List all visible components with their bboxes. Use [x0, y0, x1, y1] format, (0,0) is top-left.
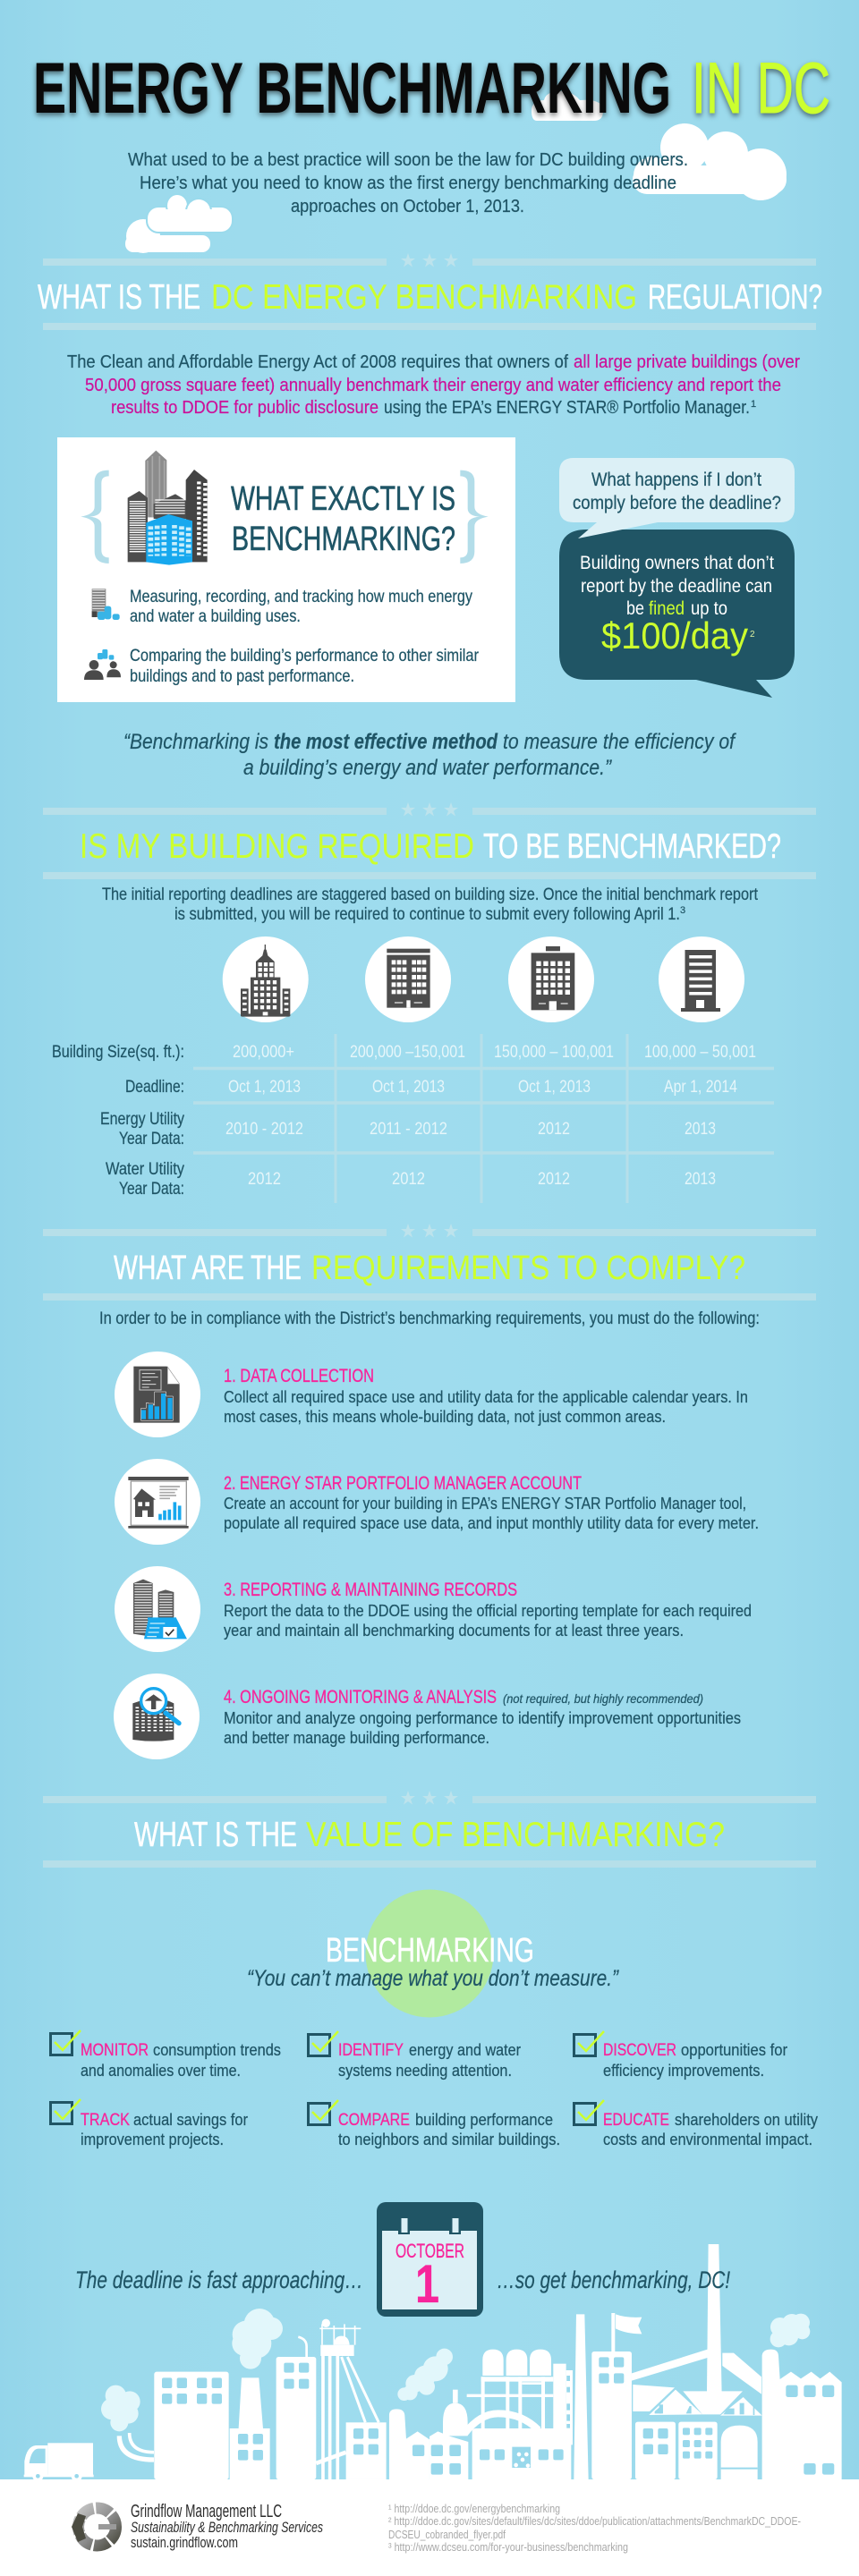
row labels: Deadline: — [125, 1078, 184, 1097]
checklist: discover: DISCOVER — [603, 2041, 676, 2060]
bullet text: measuring: and water a building uses. — [130, 607, 301, 626]
quote: the most effective method — [274, 730, 498, 754]
step 4 text: (not required, but highly recommended) — [503, 1691, 703, 1706]
table values: 2012 — [538, 1170, 570, 1189]
regulation paragraph — [67, 352, 800, 418]
skyline: right — [397, 2244, 842, 2479]
checklist: compare: to neighbors and similar buildings. — [338, 2131, 560, 2148]
checklist: identify — [308, 2031, 521, 2080]
bullet text: measuring: Measuring, recording, and tracking how much energy — [130, 588, 472, 606]
calendar — [377, 2202, 483, 2317]
intro text: What used to be a best practice will soon be the law for DC building owners. — [128, 150, 688, 170]
checklist: identify: energy and water — [409, 2041, 521, 2059]
checklist: track: TRACK — [81, 2111, 130, 2130]
speech bubble: answer — [559, 530, 795, 698]
checklist: monitor: MONITOR — [81, 2041, 149, 2060]
table values: Oct 1, 2013 — [518, 1078, 591, 1097]
intro text — [128, 150, 688, 216]
deadlines text: is submitted, you will be required to continue to submit every following April 1. — [174, 905, 680, 924]
heading: requirements to comply: WHAT ARE THE — [114, 1250, 302, 1287]
checklist: educate — [574, 2100, 818, 2148]
icon: Grindflow gear logo — [72, 2508, 116, 2546]
step 1 text — [224, 1366, 748, 1426]
table values — [225, 1043, 756, 1189]
table values: 200,000 –150,001 — [350, 1043, 465, 1062]
checklist: discover: efficiency improvements. — [603, 2062, 764, 2080]
heading: BENCHMARKING? — [232, 521, 455, 558]
table values: Oct 1, 2013 — [228, 1078, 301, 1097]
table values: 150,000 – 100,001 — [494, 1043, 614, 1062]
step 1 text: 1. DATA COLLECTION — [224, 1366, 374, 1386]
heading: is my building required: IS MY BUILDING REQUIRED — [80, 827, 474, 866]
answer text: report by the deadline can — [581, 576, 772, 597]
bullet text: measuring — [130, 588, 472, 626]
checklist: monitor: and anomalies over time. — [81, 2062, 241, 2080]
icon: reporting records — [115, 1566, 200, 1652]
answer text: up to — [691, 598, 727, 619]
checklist: identify: IDENTIFY — [338, 2041, 404, 2060]
checklist: compare: COMPARE — [338, 2111, 410, 2130]
benchmarking label: BENCHMARKING — [326, 1932, 534, 1970]
footnotes: DCSEU_cobranded_flyer.pdf — [388, 2528, 506, 2541]
regulation paragraph: 50,000 gross square feet) annually benchmark their energy and water efficiency and report the — [85, 376, 781, 395]
regulation paragraph: all large private buildings (over — [574, 352, 800, 372]
heading: what is the regulation — [38, 278, 822, 317]
heading: requirements to comply: REQUIREMENTS TO COMPLY? — [311, 1250, 745, 1287]
question text — [573, 470, 781, 513]
heading: value of benchmarking — [134, 1816, 725, 1854]
step 3 text — [224, 1580, 752, 1640]
heading: is my building required — [80, 827, 781, 866]
icon: data collection — [115, 1352, 200, 1437]
step 2 text: Create an account for your building in EPA’s ENERGY STAR Portfolio Manager tool, — [224, 1495, 746, 1513]
heading: value of benchmarking: WHAT IS THE — [134, 1816, 297, 1854]
table values: 2013 — [685, 1120, 716, 1139]
bullet text: comparing: Comparing the building’s performance to other similar — [130, 647, 480, 665]
answer text: be — [626, 598, 644, 619]
footnotes — [388, 2502, 801, 2554]
heading: value of benchmarking: VALUE OF BENCHMARKING? — [306, 1816, 725, 1854]
table values: 2010 - 2012 — [225, 1120, 303, 1139]
fine amount: $100/day — [601, 614, 748, 657]
deadlines text: The initial reporting deadlines are staggered based on building size. Once the initial benchmark report — [102, 886, 759, 904]
heading: WHAT EXACTLY IS — [231, 480, 455, 518]
step 4 text — [224, 1687, 741, 1747]
green circle — [365, 1889, 494, 2018]
icon: left clouds — [125, 195, 232, 253]
regulation paragraph: 1 — [751, 399, 756, 410]
quote: “Benchmarking is — [123, 730, 268, 754]
bullet text: comparing: buildings and to past performance. — [130, 667, 354, 686]
quote: to measure the efficiency of — [503, 730, 736, 754]
checklist: discover — [574, 2031, 787, 2080]
row labels: Year Data: — [119, 1130, 184, 1148]
checklist: discover: opportunities for — [681, 2041, 787, 2059]
table values: 200,000+ — [233, 1043, 294, 1062]
calendar month: OCTOBER — [395, 2240, 464, 2262]
heading: what is the regulation: WHAT IS THE — [38, 278, 200, 317]
icon: office block 200,000-150,001 — [365, 936, 451, 1022]
intro text: approaches on October 1, 2013. — [291, 197, 524, 216]
table values: 2012 — [538, 1120, 570, 1139]
checklist: track — [50, 2099, 248, 2148]
step 4 text: Monitor and analyze ongoing performance to identify improvement opportunities — [224, 1709, 741, 1727]
regulation paragraph: results to DDOE for public disclosure — [111, 398, 378, 418]
icon: right brace — [460, 470, 489, 564]
quote — [123, 730, 736, 780]
heading — [231, 480, 455, 558]
table values: Oct 1, 2013 — [372, 1078, 445, 1097]
row labels: Building Size(sq. ft.): — [52, 1043, 184, 1062]
step 2 text: populate all required space use data, and input monthly utility data for every meter. — [224, 1514, 759, 1532]
panel: what exactly is benchmarking — [57, 437, 515, 702]
icon: office block 150,000-100,001 — [508, 936, 594, 1022]
deadlines text: 3 — [680, 905, 685, 916]
step 2 text — [224, 1473, 759, 1532]
icon: large cloud — [633, 123, 787, 200]
row labels: Water Utility — [106, 1160, 184, 1179]
intro text: Here’s what you need to know as the first energy benchmarking deadline — [140, 174, 676, 193]
company details — [131, 2502, 323, 2551]
deadline left text: The deadline is fast approaching… — [75, 2267, 363, 2293]
table: deadlines by building size — [52, 1034, 774, 1203]
skyline: left — [24, 2309, 430, 2481]
step 3 text: Report the data to the DDOE using the official reporting template for each required — [224, 1602, 752, 1620]
step 1 text: most cases, this means whole-building data, not just common areas. — [224, 1408, 666, 1426]
heading: what is the regulation: DC ENERGY BENCHMARKING — [211, 278, 637, 317]
checklist: track: improvement projects. — [81, 2131, 224, 2148]
checklist: compare: building performance — [415, 2111, 553, 2129]
answer text — [580, 553, 774, 619]
question text: What happens if I don’t — [591, 470, 761, 490]
step 3 text: year and maintain all benchmarking documents for at least three years. — [224, 1622, 684, 1640]
checklist: compare — [308, 2100, 560, 2148]
deadline right text: …so get benchmarking, DC! — [497, 2267, 730, 2293]
table values: 2012 — [248, 1170, 281, 1189]
heading: requirements to comply — [114, 1250, 745, 1287]
company details: Grindflow Management LLC — [131, 2502, 282, 2521]
checklist: educate: EDUCATE — [603, 2111, 669, 2130]
step 1 text: Collect all required space use and utility data for the applicable calendar years. In — [224, 1388, 748, 1406]
footnote mark: 2 — [750, 630, 755, 640]
icon: monitoring and analysis — [114, 1674, 200, 1759]
icon: small cloud behind title — [532, 91, 603, 121]
checklist: monitor — [50, 2030, 281, 2080]
icon: left brace — [81, 470, 109, 564]
calendar day: 1 — [415, 2254, 439, 2314]
row labels — [52, 1043, 184, 1199]
checklist: track: actual savings for — [133, 2111, 248, 2129]
icon: building and coins — [92, 589, 120, 620]
quote: a building’s energy and water performance.” — [243, 756, 612, 780]
checklist: educate: shareholders on utility — [675, 2111, 818, 2129]
row labels: Year Data: — [119, 1180, 184, 1199]
footnotes: ³ http://www.dcseu.com/for-your-business/benchmarking — [388, 2540, 628, 2554]
table values: 2013 — [685, 1170, 716, 1189]
question text: comply before the deadline? — [573, 493, 781, 513]
icon: high-rise 200,000+ — [223, 936, 309, 1022]
answer text: fined — [649, 598, 685, 619]
table values: 2012 — [392, 1170, 425, 1189]
regulation paragraph: using the EPA’s ENERGY STAR® Portfolio Manager. — [384, 398, 750, 418]
company details: sustain.grindflow.com — [131, 2534, 238, 2551]
value quote: “You can’t manage what you don’t measure.” — [247, 1966, 619, 1991]
step 4 text: and better manage building performance. — [224, 1729, 489, 1747]
icon: city buildings — [128, 451, 208, 565]
step 4 text: 4. ONGOING MONITORING & ANALYSIS — [224, 1687, 497, 1707]
step 2 text: 2. ENERGY STAR PORTFOLIO MANAGER ACCOUNT — [224, 1473, 582, 1494]
table values: Apr 1, 2014 — [664, 1078, 737, 1097]
step 3 text: 3. REPORTING & MAINTAINING RECORDS — [224, 1580, 517, 1600]
deadlines text — [102, 886, 759, 924]
checklist: monitor: consumption trends — [153, 2041, 281, 2059]
checklist: identify: systems needing attention. — [338, 2062, 512, 2080]
icon: portfolio manager — [115, 1459, 200, 1545]
checklist: educate: costs and environmental impact. — [603, 2131, 812, 2148]
regulation paragraph: The Clean and Affordable Energy Act of 2008 requires that owners of — [67, 352, 568, 372]
icon: slim tower 100,000-50,001 — [659, 936, 744, 1022]
ground and footer area — [0, 2479, 859, 2576]
bullet text: comparing — [130, 647, 480, 686]
icon: people and coins — [84, 649, 121, 680]
row labels: Energy Utility — [100, 1110, 184, 1129]
speech bubble: question — [559, 458, 795, 538]
answer text: Building owners that don’t — [580, 553, 774, 573]
table values: 2011 - 2012 — [370, 1120, 447, 1139]
table values: 100,000 – 50,001 — [644, 1043, 756, 1062]
requirements intro: In order to be in compliance with the District’s benchmarking requirements, you must do the following: — [99, 1309, 760, 1328]
company details: Sustainability & Benchmarking Services — [131, 2519, 323, 2536]
footnotes: ¹ http://ddoe.dc.gov/energybenchmarking — [388, 2502, 560, 2515]
